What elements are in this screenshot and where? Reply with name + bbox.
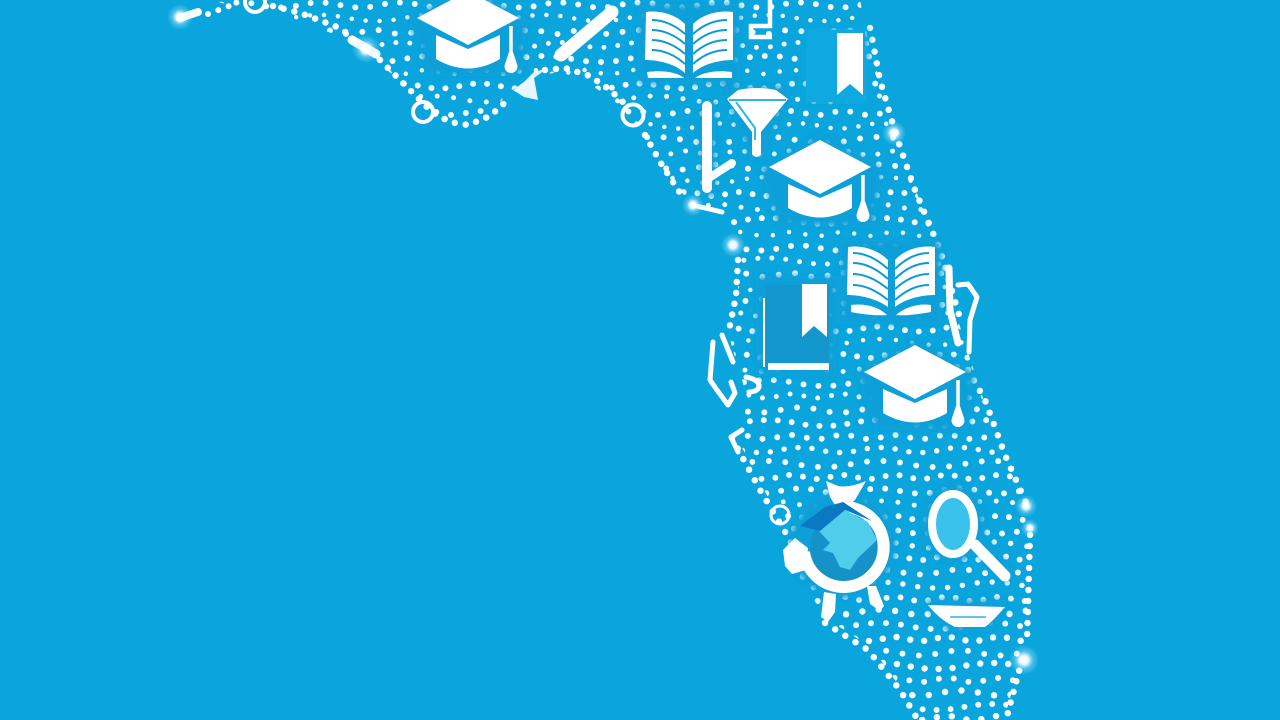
icon: magnifying glass (932, 494, 1005, 576)
icon: closed book with bookmark (764, 284, 829, 370)
interior dot rows (180, 2, 1076, 720)
icon: bookmark top (806, 30, 865, 102)
icon: coast ring top (245, 0, 265, 12)
icon halos clearing the dots (408, 0, 1014, 632)
map of Florida in dots (180, 2, 1076, 720)
eastern barrier islands (949, 268, 977, 352)
icon: coast ring centre (622, 104, 644, 126)
icon: T-shaped tool (751, 0, 772, 37)
icon: open book top (645, 12, 733, 78)
sparkles (167, 4, 1039, 675)
infographic canvas (168, 0, 1038, 720)
panhandle shoreline streaks (180, 5, 722, 212)
icon: coast ring west (413, 102, 433, 122)
icon: globe (783, 481, 884, 622)
icon: bowl (928, 605, 1005, 627)
icon: pencil bar (561, 12, 612, 55)
icon: graduation cap lower (864, 345, 966, 427)
coastline dots (273, 6, 1030, 720)
icon: small ring beside globe (771, 506, 789, 524)
icon: open book middle (847, 247, 935, 315)
icon: funnel (727, 88, 788, 157)
icon: graduation cap top (417, 0, 519, 73)
coast blob (513, 68, 548, 100)
western islands (710, 335, 759, 452)
icon: forked stick (707, 106, 732, 188)
icon: graduation cap middle (769, 140, 871, 222)
